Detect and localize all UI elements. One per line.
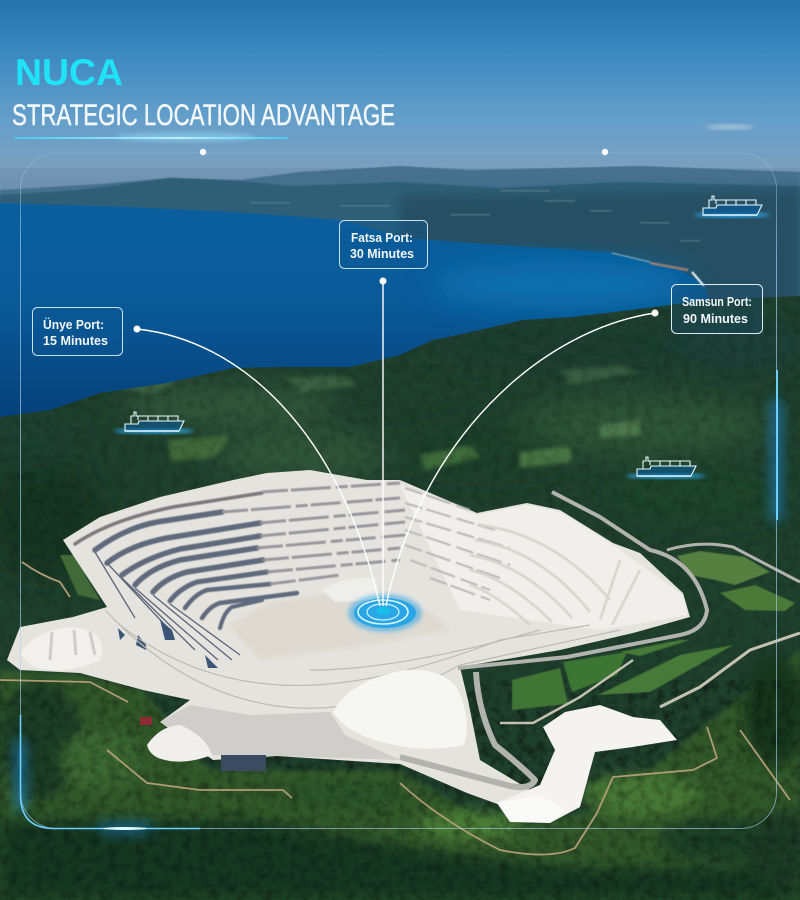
quarry: grey plaza — [160, 705, 400, 760]
route: Ünye — [134, 326, 380, 606]
icon: ship top right — [694, 196, 770, 218]
callout: Samsun Port: Samsun Port: — [682, 295, 752, 309]
heading: STRATEGIC LOCATION ADVANTAGE — [12, 99, 395, 132]
title: NUCA: NUCA — [15, 52, 123, 93]
quarry: left stockpile — [20, 627, 102, 670]
quarry: far right of terraces — [405, 488, 510, 600]
icon: ship left — [114, 412, 194, 434]
green hillside — [0, 296, 800, 900]
quarry: left stockpile ridges — [50, 630, 95, 660]
quarry: small stockpile — [147, 725, 212, 762]
green fields — [60, 505, 795, 710]
quarry: haul roads — [105, 610, 620, 708]
quarry: blue shadow patches — [118, 620, 218, 668]
frame glow: halo — [16, 400, 781, 832]
callout: Fatsa Port — [340, 220, 428, 268]
lower colour patches — [0, 655, 800, 900]
frame dot: right — [602, 149, 608, 155]
quarry: scallop shading — [470, 525, 640, 625]
route: Fatsa — [380, 278, 386, 606]
callout: Fatsa Port: Fatsa Port: — [351, 231, 413, 245]
quarry: terrace continuation — [222, 483, 405, 584]
right stockpiles — [497, 705, 677, 823]
heading underline — [14, 132, 288, 142]
frame glow: right edge — [776, 370, 778, 520]
quarry — [7, 470, 690, 805]
peninsula shoreline — [612, 253, 704, 286]
quarry: pit floor — [228, 590, 450, 660]
frame glow: left edge — [20, 715, 200, 828]
background: sea — [0, 203, 712, 430]
callout: Ünye Port: 15 Minutes — [43, 334, 108, 348]
cloud haze — [706, 124, 754, 130]
callout: Samsun Port: 90 Minutes — [683, 312, 748, 326]
red vehicles — [140, 717, 152, 725]
roads — [400, 492, 800, 787]
target marker — [348, 594, 422, 632]
callout: Ünye Port — [32, 308, 122, 356]
callout: Ünye Port: Ünye Port: — [43, 317, 104, 332]
hillside colour patches — [0, 317, 800, 580]
glass frame — [16, 149, 781, 832]
icon: ship right — [626, 457, 706, 478]
frame dot: left — [200, 149, 206, 155]
forest texture — [0, 298, 800, 688]
frame glow: spark — [103, 827, 147, 830]
buildings — [221, 755, 266, 771]
quarry: left terraces — [75, 493, 297, 628]
quarry: central mound — [322, 578, 380, 602]
lower texture — [0, 680, 800, 900]
callout: Samsun Port — [672, 284, 762, 334]
hillside light fields — [120, 365, 640, 470]
quarry: pale body — [7, 470, 690, 805]
quarry: main stockpile — [333, 670, 467, 749]
quarry: diagonal lower arms — [95, 552, 240, 660]
background: sky — [0, 0, 800, 200]
dirt tracks — [0, 562, 790, 855]
callout: Fatsa Port: 30 Minutes — [350, 247, 414, 261]
sea highlight — [430, 261, 690, 309]
route: Samsun — [386, 310, 658, 606]
lower land — [0, 650, 800, 900]
far shore speckle — [250, 190, 700, 242]
distant hills — [0, 166, 800, 330]
quarry: upper right white faces — [400, 485, 688, 630]
